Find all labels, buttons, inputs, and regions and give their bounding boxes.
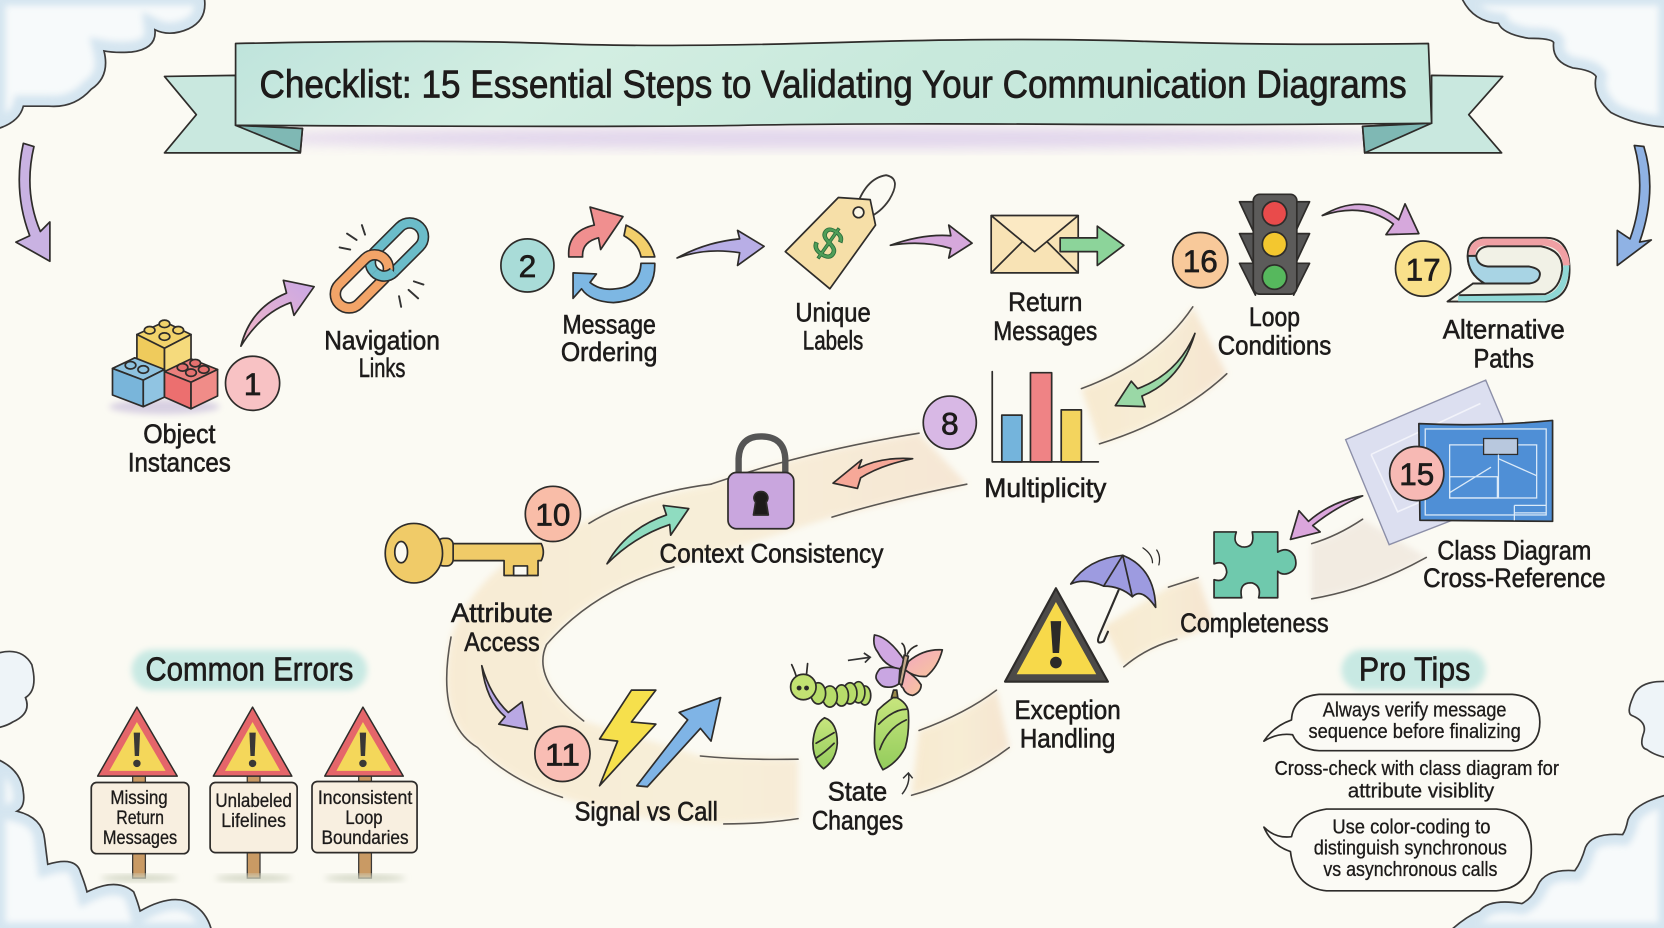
label: state changes: State <box>828 777 887 807</box>
label: signal vs call: Signal vs Call <box>575 797 718 827</box>
label: navigation links <box>324 325 440 383</box>
icon: lego blocks <box>112 320 218 409</box>
label: alternative paths <box>1443 315 1565 373</box>
label: completeness: Completeness <box>1180 608 1329 638</box>
tip bubble 1: sequence before finalizing <box>1308 720 1521 743</box>
banner tail right <box>1363 75 1503 153</box>
tip bubble 3: Use color-coding to <box>1332 815 1490 839</box>
icon: small cocoon <box>813 718 837 769</box>
label: navigation links: Navigation <box>324 325 440 355</box>
tip 2 text: attribute visiblity <box>1348 779 1495 802</box>
label: loop conditions <box>1218 302 1331 361</box>
label: exception handling: Exception <box>1015 695 1121 725</box>
badge 16: 16 <box>1183 243 1218 279</box>
arrow: corner left <box>16 143 50 261</box>
step: loop conditions <box>1173 194 1331 361</box>
label: unique labels <box>795 298 871 355</box>
banner fold left <box>236 125 302 152</box>
step: message ordering <box>501 207 657 367</box>
badge 16 <box>1173 233 1228 288</box>
badge 10: 10 <box>535 497 570 533</box>
cloud: top right <box>1460 0 1664 127</box>
road ribbon: loop to multiplicity <box>1081 307 1227 444</box>
label: class diagram cross-reference <box>1423 536 1606 593</box>
arrow: ordering to labels <box>677 230 764 265</box>
label: attribute access: Attribute <box>451 598 553 628</box>
tip 2 text <box>1275 757 1559 802</box>
sign: inconsistent loop boundaries: Inconsistent <box>318 788 413 809</box>
road ribbon: state changes to exception <box>912 690 1009 795</box>
heading highlight <box>1341 650 1486 690</box>
panel: pro tips <box>1264 650 1559 891</box>
label: message ordering: Message <box>562 309 656 339</box>
badge 2: 2 <box>519 248 536 284</box>
arrow: corner right <box>1617 145 1651 265</box>
badge 8: 8 <box>941 405 959 441</box>
banner fold right <box>1363 123 1432 153</box>
sign: missing return messages: Messages <box>103 828 177 849</box>
heading: Common Errors <box>145 651 353 688</box>
icon: blueprint <box>1419 420 1553 521</box>
label: return messages: Return <box>1008 287 1082 317</box>
sign: unlabeled lifelines: Lifelines <box>221 811 286 832</box>
sign: missing return messages: Missing <box>110 788 168 809</box>
road ribbon: completeness to class diagram <box>1312 519 1426 599</box>
tip bubble 1 <box>1264 694 1540 751</box>
badge 11: 11 <box>545 737 580 773</box>
label: unique labels: Labels <box>803 325 863 355</box>
step: context consistency <box>660 436 884 569</box>
arrow: multiplicity to lock <box>833 458 913 488</box>
label: navigation links: Links <box>359 353 405 383</box>
tip bubble 3: distinguish synchronous <box>1314 837 1507 860</box>
label: context consistency: Context Consistency <box>660 539 884 569</box>
label: attribute access: Access <box>464 627 540 657</box>
sign: inconsistent loop boundaries: Boundaries <box>322 828 409 849</box>
sign: missing return messages <box>91 707 189 881</box>
badge 17: 17 <box>1406 251 1441 287</box>
badge 11 <box>535 726 590 781</box>
sign: unlabeled lifelines <box>210 707 297 881</box>
label: message ordering <box>561 309 657 367</box>
road ribbon: exception to completeness <box>1104 578 1215 667</box>
arrow: attribute to context <box>607 505 689 564</box>
label: loop conditions: Loop <box>1249 302 1300 332</box>
label: object instances: Instances <box>128 447 231 477</box>
label: state changes <box>812 777 903 835</box>
step: signal vs call <box>535 690 721 827</box>
badge 1: 1 <box>244 366 261 402</box>
icon: butterfly <box>874 635 942 695</box>
label: exception handling <box>1015 695 1121 753</box>
step: completeness <box>1180 532 1329 638</box>
step: exception handling <box>1005 548 1160 753</box>
cloud: top left <box>0 0 205 130</box>
icon: forked path ribbon <box>1448 238 1570 302</box>
cloud: bottom left large <box>0 758 212 928</box>
title: Checklist: 15 Essential Steps to Validating Your Communication Diagrams <box>259 63 1407 107</box>
tip bubble 3 <box>1264 809 1531 891</box>
arrow: step 1 to navigation <box>241 280 314 346</box>
step: alternative paths <box>1396 238 1570 373</box>
step: state changes <box>791 635 942 835</box>
step: unique labels <box>785 175 895 355</box>
badge 15: 15 <box>1399 456 1434 492</box>
step: object instances <box>109 320 280 477</box>
icon: warning triangle <box>1005 588 1108 682</box>
label: object instances: Object <box>143 419 216 449</box>
arrow: class diagram to completeness <box>1290 496 1363 539</box>
banner tail left <box>164 75 302 153</box>
label: alternative paths: Paths <box>1474 343 1534 373</box>
label: return messages: Messages <box>993 316 1097 346</box>
cloud: bottom left small <box>0 651 34 728</box>
icon: caterpillar <box>791 664 871 707</box>
arrow: labels to return messages <box>890 225 972 258</box>
icon: transition arrow <box>848 653 870 663</box>
sign: missing return messages: Return <box>116 808 164 829</box>
label: unique labels: Unique <box>795 298 871 328</box>
icon: chain link <box>330 217 429 314</box>
step: navigation links <box>324 217 440 383</box>
icon: small up arrow <box>902 773 913 794</box>
arrow: loop to alternative paths <box>1322 204 1419 235</box>
sign: inconsistent loop boundaries <box>312 707 417 881</box>
cloud: bottom right small <box>1629 681 1664 758</box>
icon: envelope <box>991 216 1124 273</box>
label: multiplicity: Multiplicity <box>984 473 1107 503</box>
label: class diagram cross-reference: Cross-Reference <box>1423 563 1606 593</box>
banner body <box>236 40 1432 126</box>
icon: lightning bolt <box>600 690 656 786</box>
arrow: attribute to signal <box>482 666 527 729</box>
icon: large cocoon <box>874 690 909 770</box>
icon: traffic light <box>1240 194 1310 295</box>
label: return messages <box>993 287 1097 346</box>
label: object instances <box>128 419 231 477</box>
icon: umbrella <box>1071 548 1160 643</box>
icon: padlock <box>728 436 794 529</box>
badge 2 <box>501 239 554 292</box>
step: return messages <box>991 216 1124 346</box>
label: exception handling: Handling <box>1020 723 1115 753</box>
badge 10 <box>525 486 580 542</box>
icon: blue arrow <box>637 698 721 787</box>
label: message ordering: Ordering <box>561 337 657 367</box>
tip bubble 1: Always verify message <box>1323 699 1506 722</box>
sign: inconsistent loop boundaries: Loop <box>345 808 383 829</box>
icon: key <box>385 523 543 583</box>
icon: price tag <box>785 175 895 289</box>
label: alternative paths: Alternative <box>1443 315 1565 345</box>
tip bubble 3: vs asynchronous calls <box>1323 858 1497 881</box>
step: attribute access <box>385 486 580 657</box>
badge 1 <box>226 356 280 410</box>
label: class diagram cross-reference: Class Diagram <box>1437 536 1591 566</box>
sign: unlabeled lifelines: Unlabeled <box>215 791 292 812</box>
road ribbon: multiplicity through lock and attribute curve to signal <box>447 433 967 824</box>
badge 17 <box>1396 241 1451 296</box>
title banner <box>164 40 1503 153</box>
heading: Pro Tips <box>1359 651 1470 688</box>
arrow: loop to multiplicity <box>1115 333 1195 407</box>
label: attribute access <box>451 598 553 657</box>
badge 8 <box>923 396 976 449</box>
heading highlight <box>132 650 367 690</box>
label: loop conditions: Conditions <box>1218 331 1331 361</box>
icon: puzzle piece <box>1214 532 1296 598</box>
step: class diagram cross-reference <box>1346 380 1606 593</box>
panel: common errors <box>91 650 417 881</box>
label: state changes: Changes <box>812 805 903 835</box>
step: multiplicity <box>923 372 1107 503</box>
cloud: bottom right large <box>1448 794 1664 928</box>
icon: bar chart <box>992 372 1098 462</box>
badge 15 <box>1390 446 1444 501</box>
icon: back sheet <box>1346 380 1507 545</box>
icon: cycle arrows <box>569 207 655 303</box>
tip 2 text: Cross-check with class diagram for <box>1275 757 1559 780</box>
icon: price tag: $ <box>804 216 853 271</box>
